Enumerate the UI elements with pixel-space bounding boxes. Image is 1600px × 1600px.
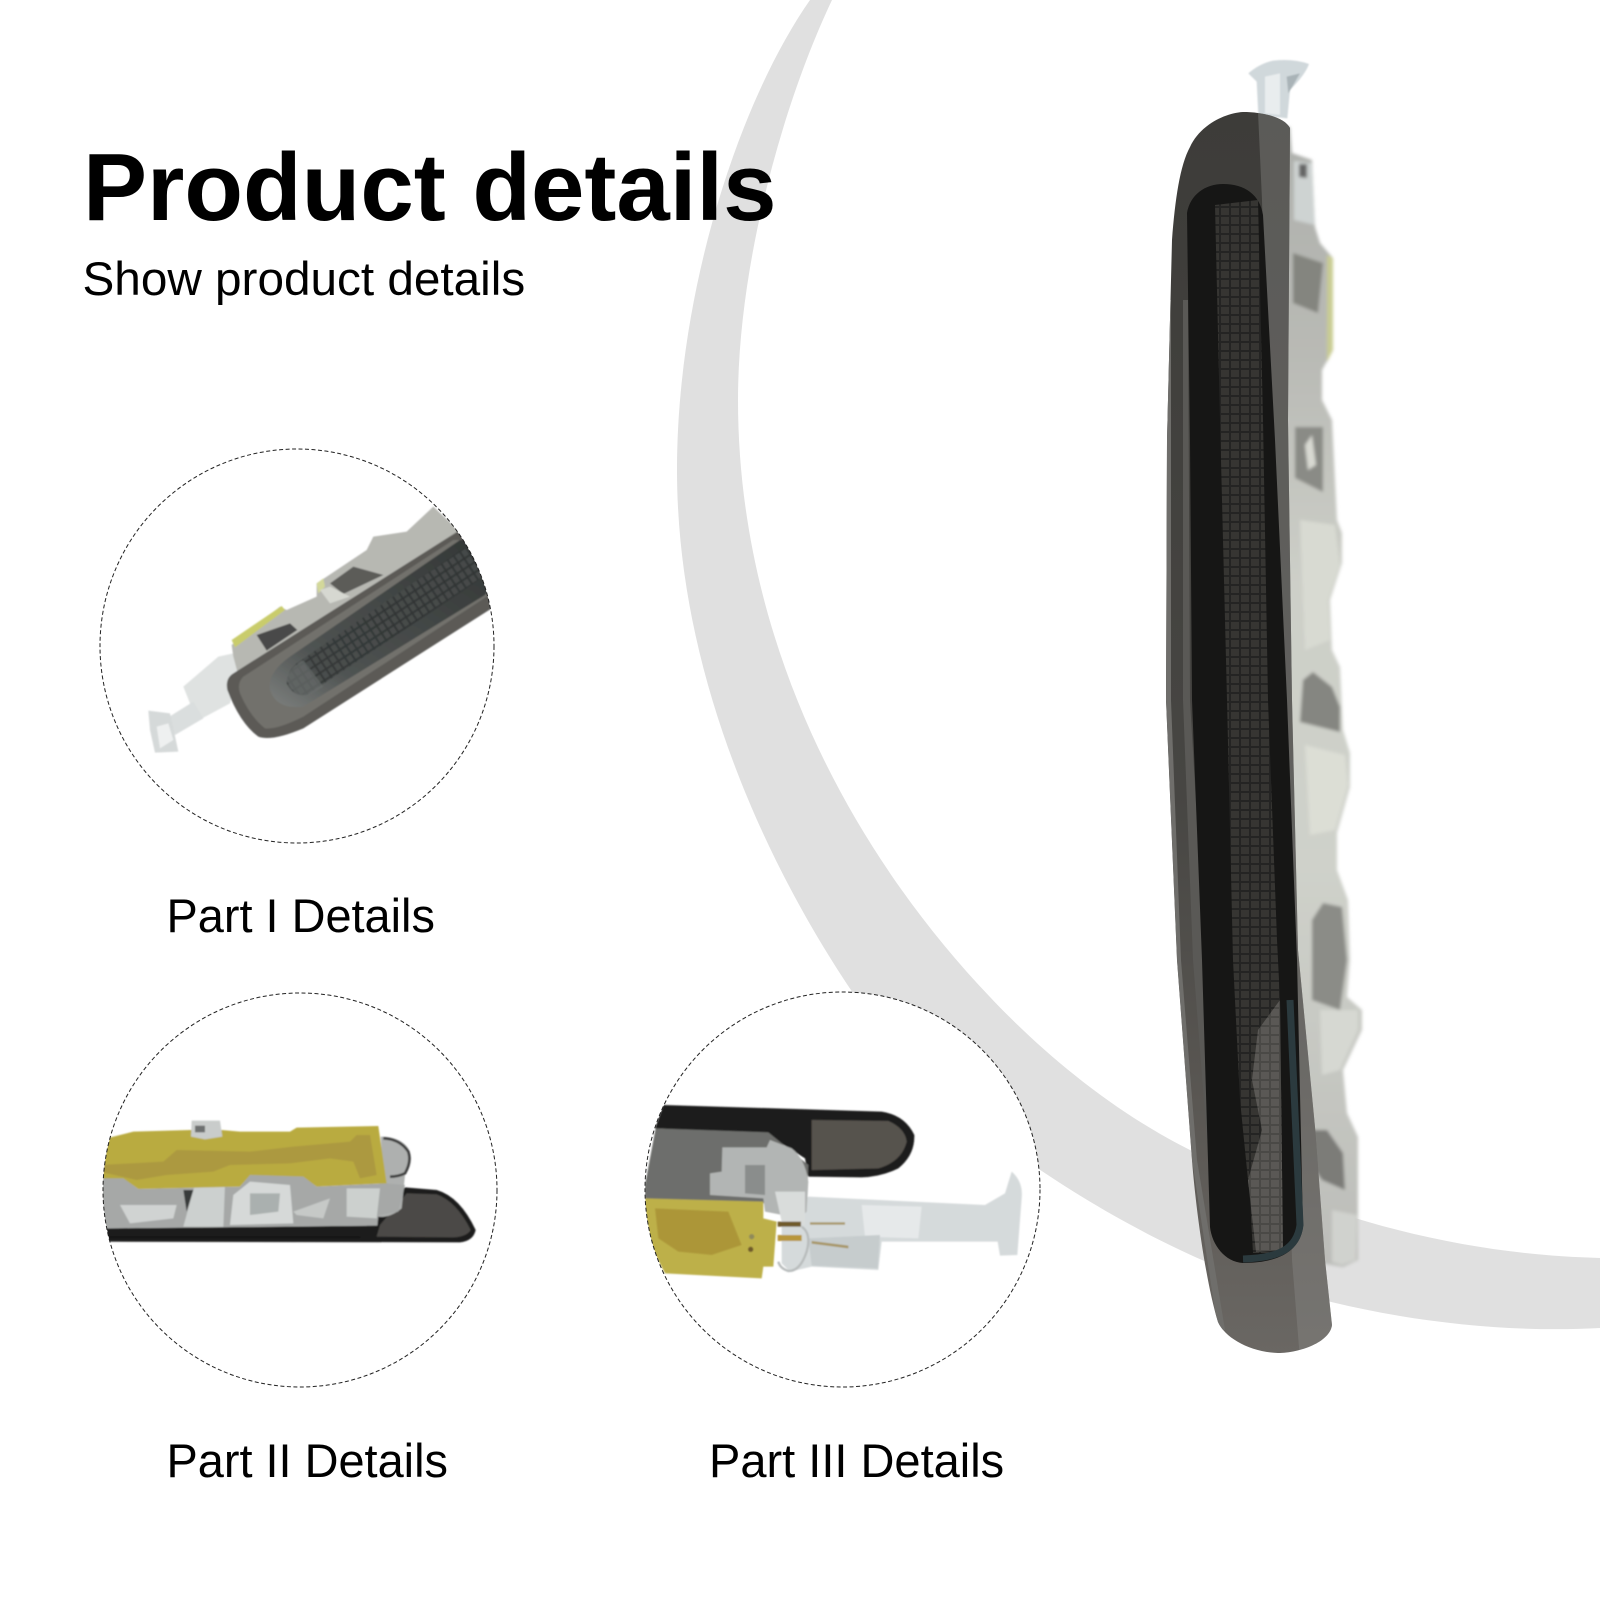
dashed circle outline xyxy=(645,992,1040,1387)
grey body behind housing xyxy=(645,1128,808,1203)
yellow circuit board xyxy=(100,1126,387,1189)
label: part II: Part II Details xyxy=(166,1435,448,1487)
dashed circle outline xyxy=(100,449,494,843)
lighter lower texture xyxy=(1248,1000,1283,1252)
title: Product details xyxy=(83,134,776,241)
grey pads inside housing xyxy=(1293,253,1323,313)
yellow board edge xyxy=(232,606,285,647)
pale highlights in housing xyxy=(1300,520,1340,650)
panel: part II detail circle xyxy=(100,993,497,1387)
metal pin wires xyxy=(778,1222,801,1227)
label: part I: Part I Details xyxy=(166,890,435,942)
clear housing over body xyxy=(710,1140,808,1218)
part II photo: circuit board and lens xyxy=(100,1121,476,1242)
dark pads xyxy=(257,623,297,651)
panel: part III detail circle xyxy=(645,992,1040,1387)
part I photo: angled lens end with pin xyxy=(148,507,530,753)
yellow board edge xyxy=(1327,255,1333,362)
copper traces on the board xyxy=(100,1135,377,1180)
clear clip loop xyxy=(778,1227,808,1271)
lens texture xyxy=(286,549,480,695)
panel: main product, third brake light xyxy=(1166,60,1362,1360)
clear pin and head xyxy=(183,654,237,718)
fine plate pin highlight xyxy=(100,1237,360,1238)
subtitle: Show product details xyxy=(82,253,525,306)
background: grey sweeping arc xyxy=(677,0,1600,1329)
clear housing xyxy=(100,1174,405,1228)
dark smoked lens xyxy=(1166,112,1335,1360)
part III photo: connector end with pins xyxy=(645,1105,1022,1278)
solder points xyxy=(749,1234,754,1239)
small metal chip on board xyxy=(191,1121,222,1139)
dashed circle outline xyxy=(103,993,497,1387)
clear pin shaft and head xyxy=(782,1172,1022,1272)
dark lens plate xyxy=(655,1105,914,1177)
yellow circuit board xyxy=(645,1198,777,1278)
clear cylinder end xyxy=(377,1137,411,1217)
label: part III: Part III Details xyxy=(709,1434,1004,1487)
dark inner channel xyxy=(271,539,486,706)
clear housing on the right side xyxy=(1280,127,1362,1267)
panel: part I detail circle xyxy=(100,449,530,843)
black inner lens channel xyxy=(1187,184,1303,1263)
LED lens texture xyxy=(1215,200,1283,1253)
dark lens plate xyxy=(100,1187,476,1242)
smoked lens body xyxy=(226,532,490,739)
clear housing xyxy=(232,507,465,682)
inner ring at base of the lens xyxy=(1243,1000,1300,1259)
icon: clear mounting pin on top xyxy=(1248,60,1309,118)
upper clear tab xyxy=(1294,161,1315,225)
